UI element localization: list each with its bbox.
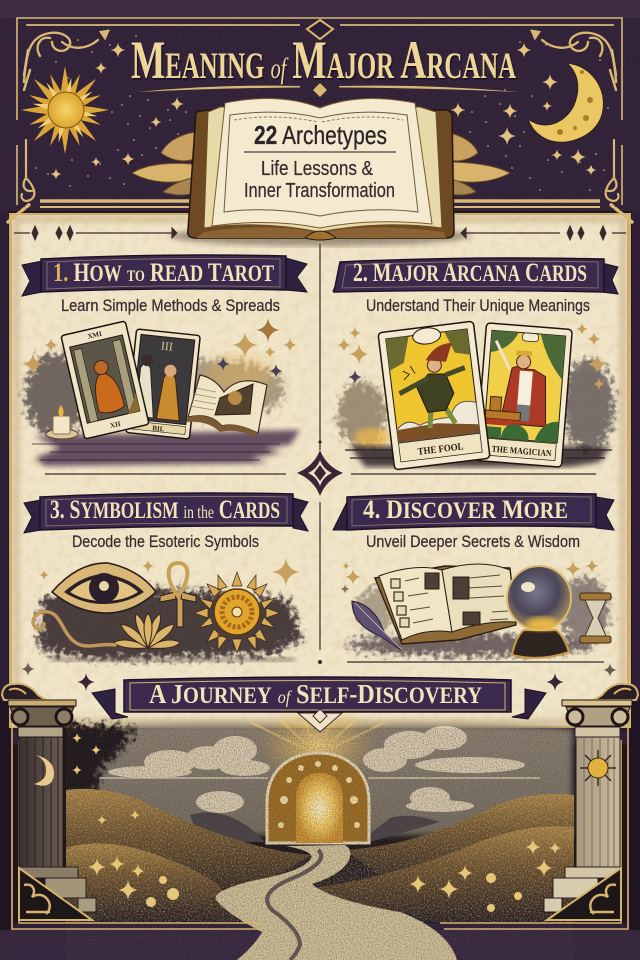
pillar: right with sun [544,684,638,912]
hills: near left and right [66,826,574,922]
illustration: shadows and table [338,359,614,467]
icon: card the fool: THE FOOL [417,441,464,458]
icon: tarot card XII [61,321,149,439]
arch gate [267,753,369,843]
section rules [45,474,604,662]
icon: ankh [160,563,196,627]
icon: crystal ball [507,566,571,658]
icon: symbol sun [194,572,280,653]
icon: tarot card III: BIL [152,424,165,433]
section 2: major arcana cards [333,258,618,470]
section 3: symbolism in the cards [21,493,617,691]
book text: heading: 22 Archetypes [254,120,387,150]
scene dark base [13,745,627,923]
corner: lower left triangle [19,868,92,920]
icon: tarot card III: III [160,339,174,354]
banner: a journey of self-discovery [92,677,546,732]
decorative stars 1 [22,318,297,378]
hills: far left and right [66,788,574,888]
banner 4: 4. DISCOVER MORE [363,495,568,524]
icon: small open book [186,375,267,437]
center diamond ornament [297,440,343,664]
scene stars [72,733,561,912]
book text: subtitle: Life Lessons & [261,158,374,180]
clouds [108,726,525,813]
dark sky corners [62,724,135,800]
corner: lower right triangle [547,868,621,920]
icon: card the fool [378,321,490,470]
icon: candle [46,405,78,439]
icon: card the magician: THE MAGICIAN [491,444,552,458]
pillar: left with moon [2,684,96,912]
illustration: shadow [345,578,610,656]
decorative stars 4 [340,559,599,594]
horizon [100,777,540,779]
panel: journey landscape [13,703,627,960]
illustration: dark backdrop [38,590,302,662]
banner: a journey of self-discovery: A JOURNEY of SELF-DISCOVERY [149,679,482,709]
icon: tarot card III [126,329,200,439]
header frame [17,18,622,207]
grain overlay [66,728,574,960]
icon: tarot card XII: XII [109,420,122,430]
icon: eye of providence [52,563,156,613]
subheading 2: Understand Their Unique Meanings [366,296,590,315]
stars in header [36,36,608,190]
banner 1 [22,255,307,296]
banner 3: 3. SYMBOLISM in the CARDS [50,495,280,524]
decorative stars 3 [21,558,617,691]
panel: cream parchment [8,211,632,730]
section 1: how to read tarot [22,255,307,466]
book text: subtitle [244,158,395,202]
hill gold speckle [66,785,574,922]
banner 3 [24,493,308,533]
title: MEANING of MAJOR ARCANA [131,30,516,90]
section 4: discover more [333,493,614,658]
icon: tarot card XII: XMI [87,330,103,341]
frame lines bottom [12,725,628,929]
icon: card the magician [476,323,572,467]
banner 2: 2. MAJOR ARCANA CARDS [353,258,587,287]
center divider [319,244,321,650]
title flourish [137,83,518,97]
icon: serpent [33,612,115,646]
winding road [216,845,457,960]
open book [170,99,470,246]
corner ornaments: panel shoulders [8,140,632,222]
sky [70,723,572,835]
illustration: shadows and table [25,353,300,466]
decorative stars 2 [337,323,607,390]
banner 4 [333,493,614,530]
top rules with diamonds [14,226,626,240]
icon: lotus [114,613,180,648]
icon: hourglass [580,593,611,643]
book divider [244,151,396,153]
corner ornaments: top left [24,31,108,90]
subheading 1: Learn Simple Methods & Spreads [61,296,280,315]
banner 1: 1. HOW TO READ TAROT [53,258,274,287]
corner ornaments: top right [532,31,616,90]
subheading 4: Unveil Deeper Secrets & Wisdom [366,532,580,551]
subheading 3: Decode the Esoteric Symbols [72,532,259,551]
book text: subtitle: Inner Transformation [244,180,395,202]
icon: sun [21,66,109,154]
icon: leaves behind book [132,132,510,195]
icon: crescent moon [528,63,603,142]
icon: quill [352,601,404,652]
sun rays [250,713,386,768]
icon: open journal [375,564,516,644]
